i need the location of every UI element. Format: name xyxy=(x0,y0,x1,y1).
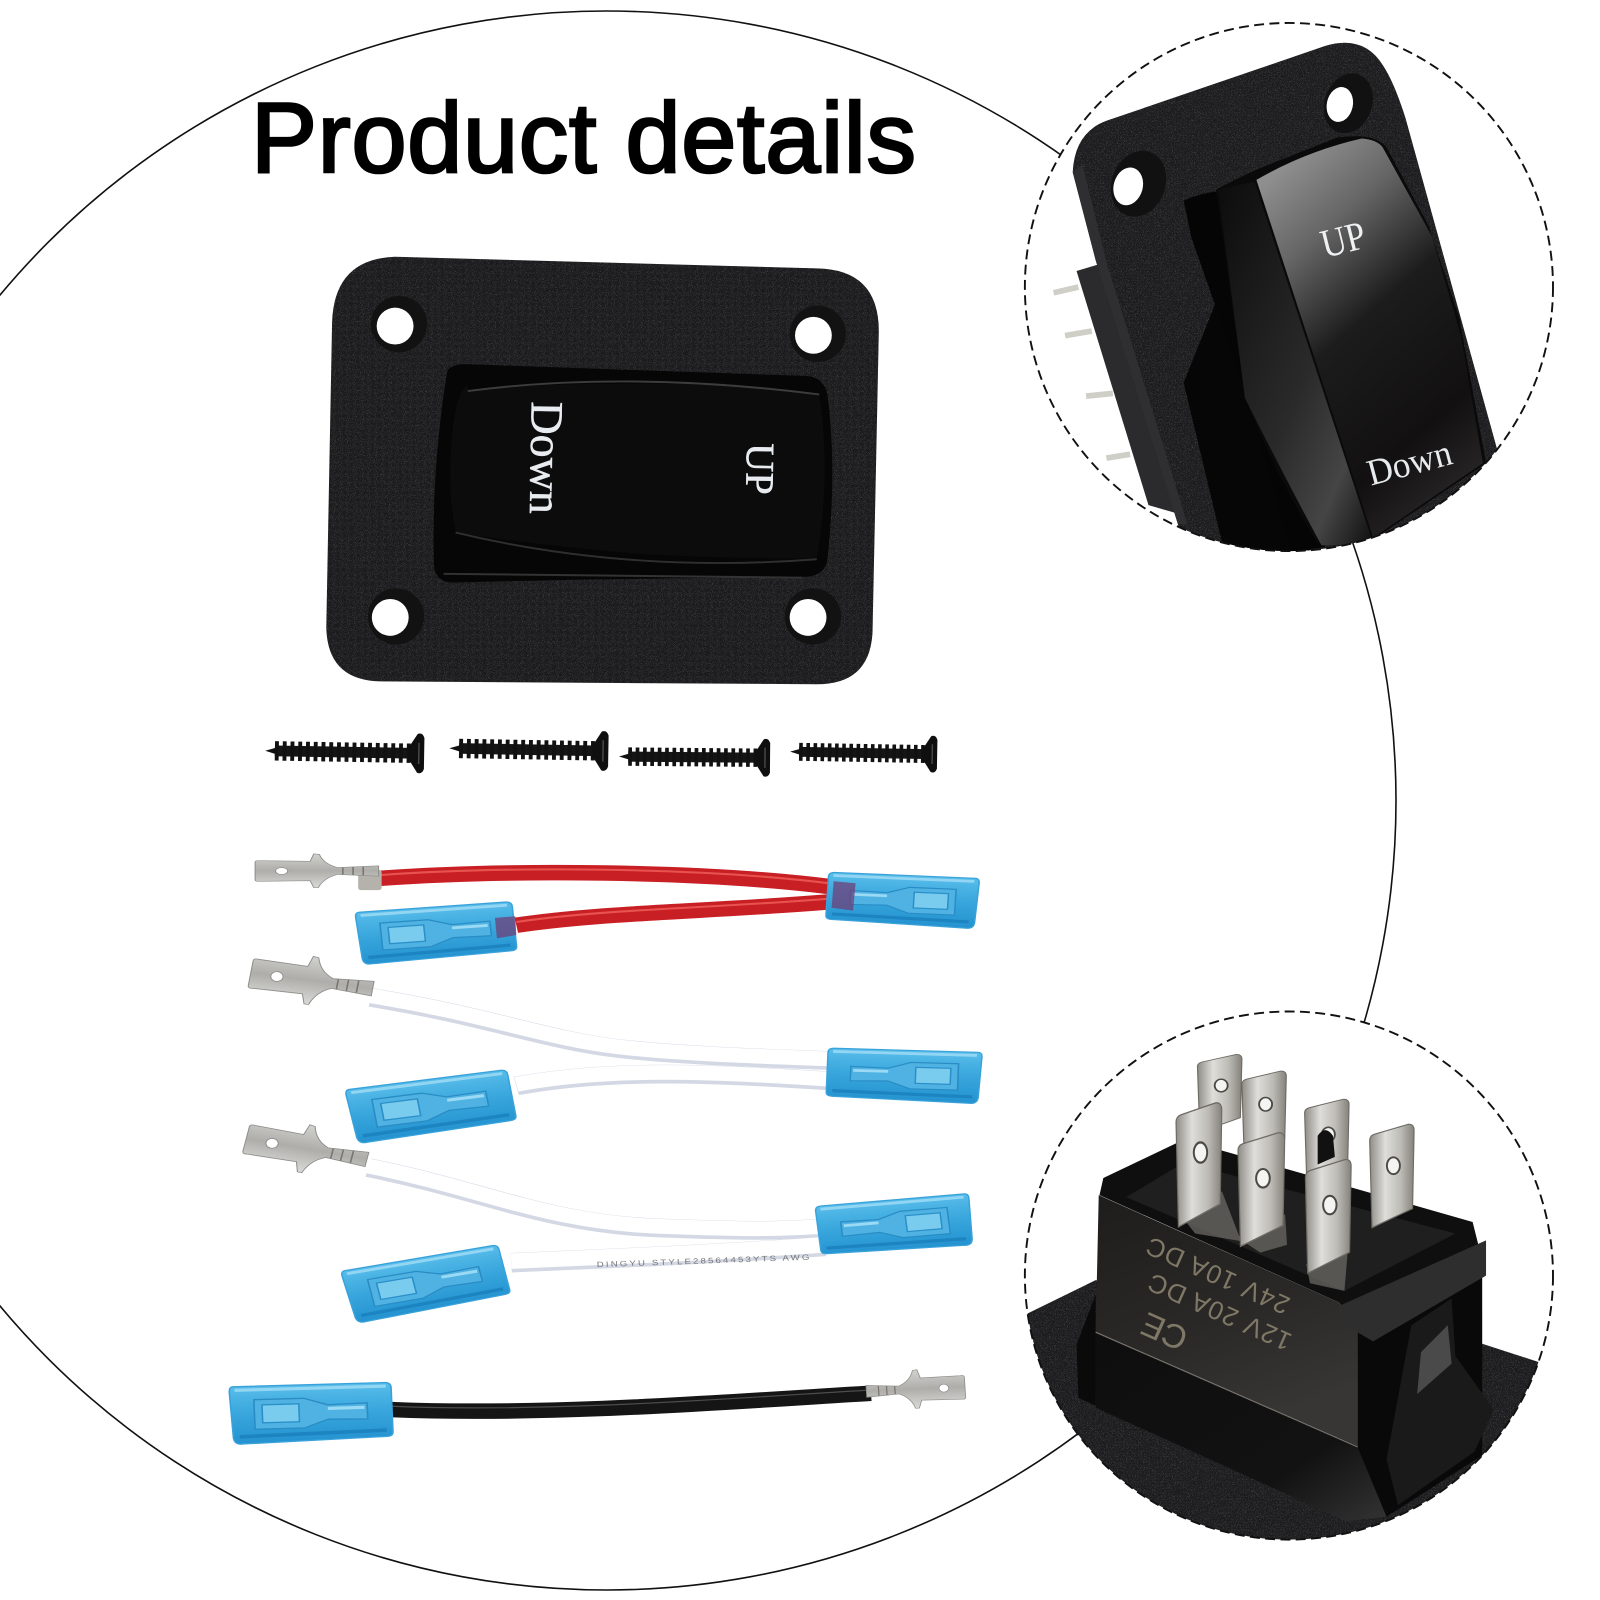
wire print text: DINGYU STYLE28564453YTS AWG xyxy=(597,1253,810,1269)
wiring harnesses xyxy=(229,854,982,1444)
rocker xyxy=(1184,136,1486,551)
white wire pair 2 xyxy=(240,1115,975,1324)
detail circle: switch terminals rear view xyxy=(1024,1010,1554,1541)
dashed circle outline xyxy=(1025,23,1553,551)
printed rating text: 24V 10A DC xyxy=(1141,1230,1294,1321)
spade terminals xyxy=(1176,1054,1414,1273)
screw holes xyxy=(368,296,846,645)
detail circle: angled rocker view xyxy=(1025,23,1553,574)
angled plate xyxy=(1073,43,1505,574)
printed rating text: 12V 20A DC xyxy=(1142,1267,1296,1357)
dashed circle outline xyxy=(1025,1011,1553,1540)
product: switch panel front view xyxy=(265,257,937,777)
white wire pair 1 xyxy=(246,949,982,1144)
rocker switch xyxy=(434,364,832,583)
mounting plate xyxy=(326,257,879,684)
switch housing xyxy=(1077,1140,1494,1521)
white disc xyxy=(1025,1011,1553,1540)
four screws xyxy=(265,728,937,777)
switch body and pins xyxy=(1054,264,1182,515)
label: UP: UP xyxy=(737,443,783,495)
label: Down: Down xyxy=(1363,432,1456,494)
printed rating text xyxy=(1140,1238,1292,1349)
label: Down: Down xyxy=(520,401,573,514)
panel behind switch xyxy=(1028,1280,1538,1540)
red wire pair xyxy=(255,854,979,965)
black wire xyxy=(229,1368,966,1444)
title: Product details xyxy=(251,82,916,193)
printed rating text: CE xyxy=(1136,1304,1194,1357)
label: UP: UP xyxy=(1316,213,1370,267)
mounting holes xyxy=(1102,66,1381,225)
white disc xyxy=(1025,23,1553,551)
